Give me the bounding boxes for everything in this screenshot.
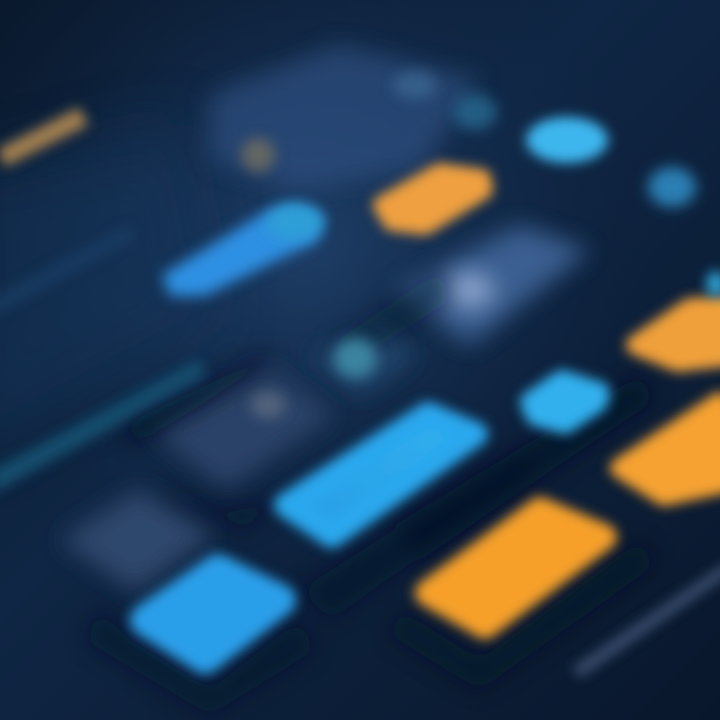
orange bar: right top — [636, 305, 720, 362]
long blue bar: center — [286, 414, 476, 536]
streaks: left teal line and bottom-right grey line — [0, 225, 720, 678]
blue block: bottom left — [146, 570, 280, 658]
orange pill: top center — [382, 172, 484, 226]
blue bar: upper middle — [162, 204, 323, 296]
orange bar: right — [620, 402, 720, 496]
orange bar: top left — [0, 110, 86, 164]
small dots: top row — [241, 71, 696, 378]
large orange bar: bottom — [428, 510, 604, 626]
blue pill: top right — [526, 117, 608, 163]
blue sliver: right edge — [706, 271, 720, 297]
dim panels — [60, 45, 590, 592]
dark gutters — [85, 270, 655, 715]
small blue block — [530, 380, 600, 424]
